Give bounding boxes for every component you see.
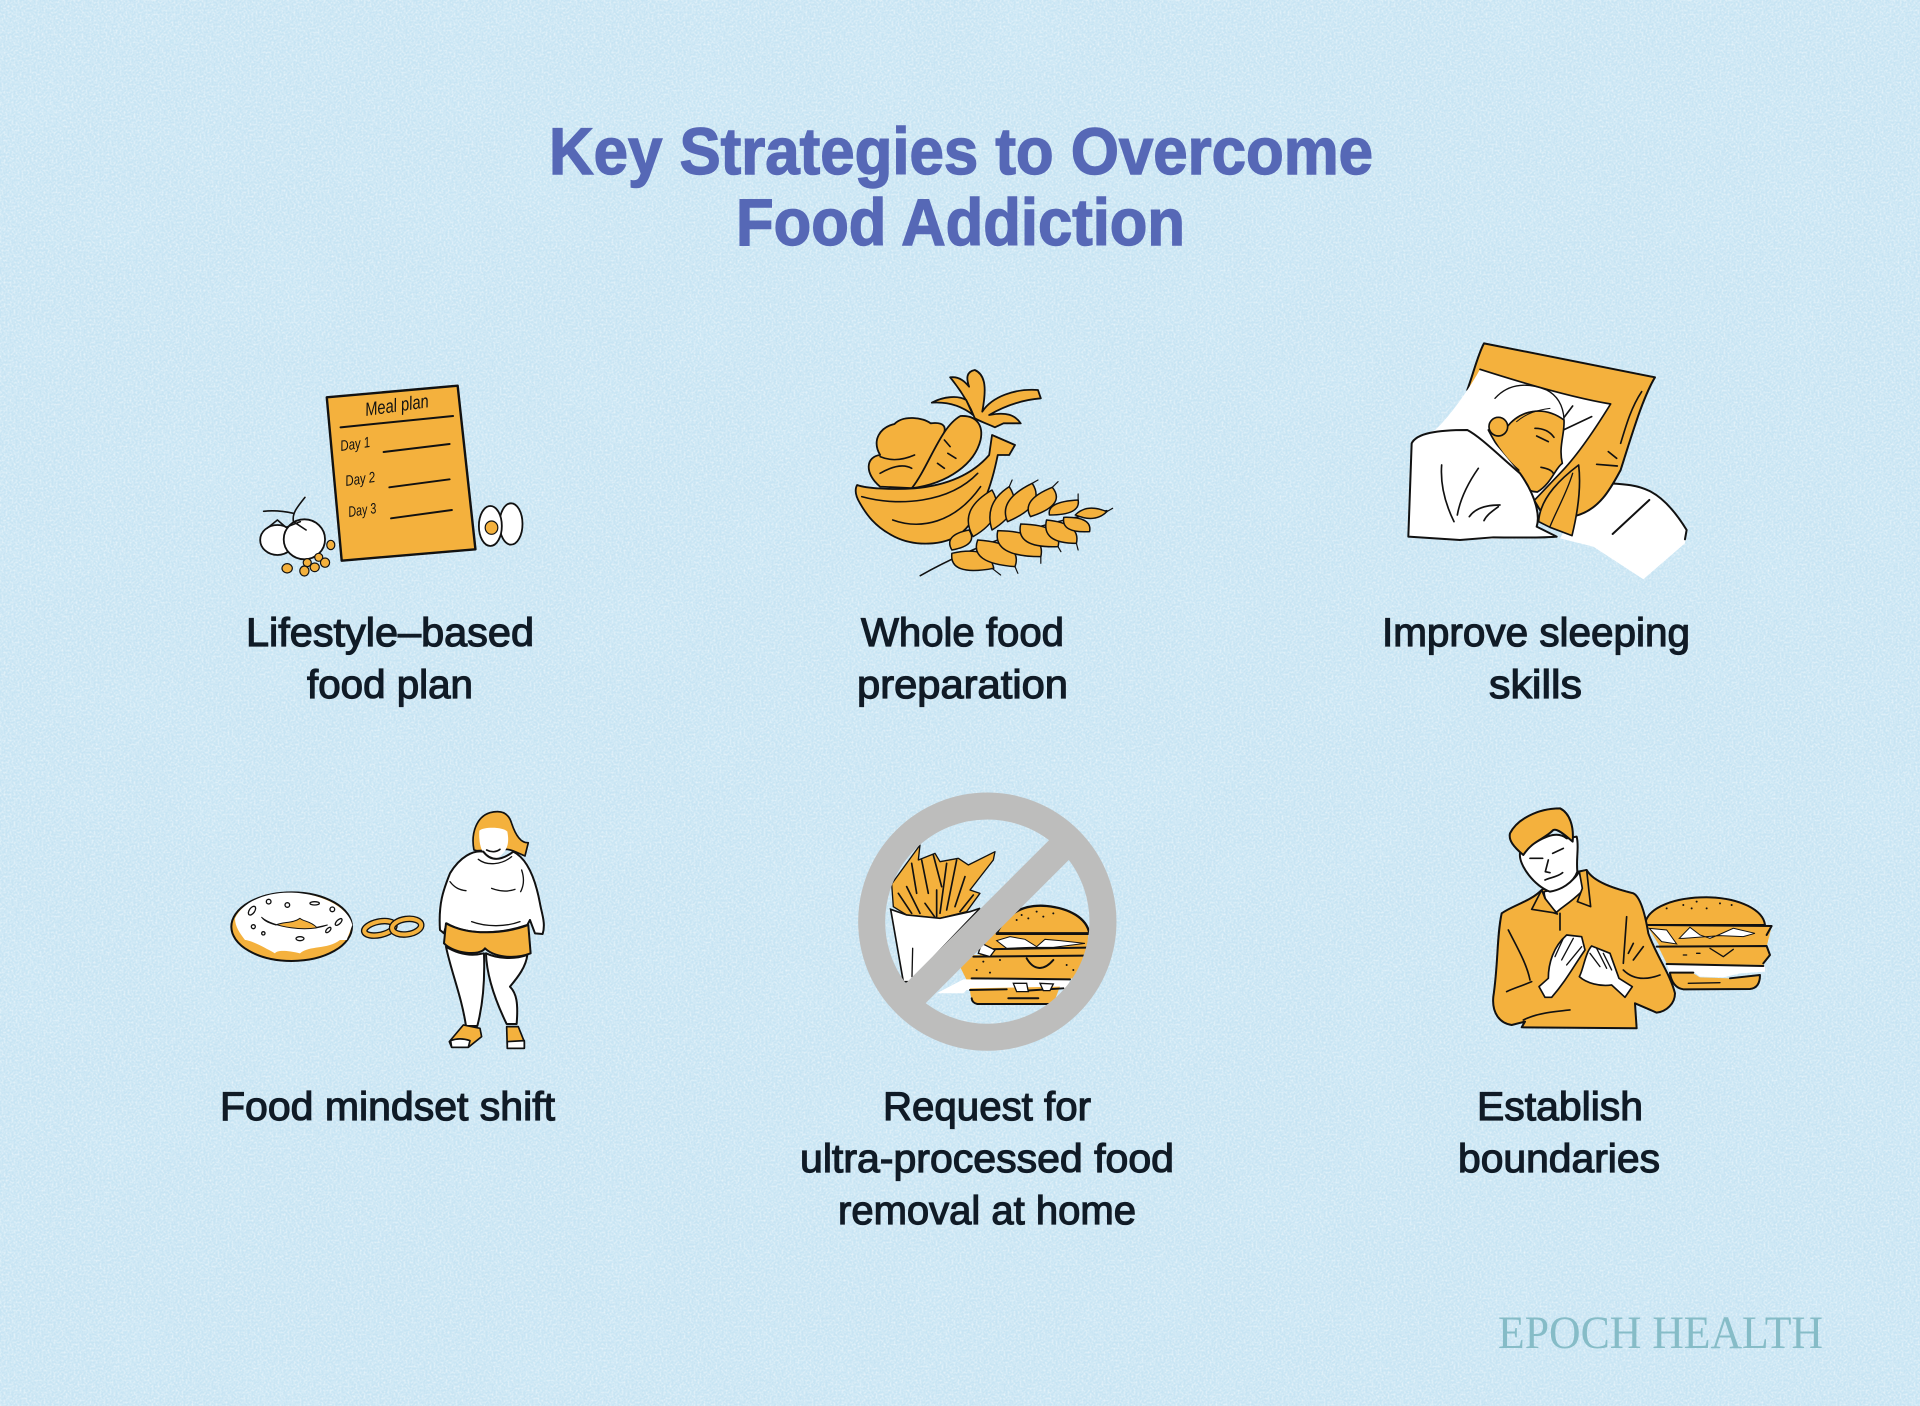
woman figure xyxy=(440,812,544,1048)
title xyxy=(549,114,1373,259)
label: establish boundaries: Establish xyxy=(1477,1085,1643,1129)
icon: prohibited fries and burger xyxy=(872,806,1103,1037)
icon: meal plan with tomatoes and egg xyxy=(260,386,522,576)
icon: meal plan with tomatoes and egg: Meal plan xyxy=(364,391,430,421)
label: whole food preparation: preparation xyxy=(857,663,1068,707)
icon: donut chained to person xyxy=(231,812,544,1048)
icon: whole foods bundle xyxy=(856,370,1113,576)
icon: sleeping person on pillow xyxy=(1408,343,1687,579)
title: Key Strategies to Overcome xyxy=(549,114,1373,188)
label: establish boundaries: boundaries xyxy=(1458,1137,1660,1181)
label: improve sleeping skills xyxy=(1382,611,1690,707)
label: lifestyle-based food plan xyxy=(246,611,534,707)
label: whole food preparation xyxy=(857,611,1068,707)
label: request for removal: ultra-processed food xyxy=(800,1137,1174,1181)
burger xyxy=(1645,897,1772,989)
label: improve sleeping skills: Improve sleeping xyxy=(1382,611,1690,655)
label: request for removal: removal at home xyxy=(838,1189,1136,1233)
donut xyxy=(231,892,352,961)
logo: Epoch Health: EPOCH HEALTH xyxy=(1498,1307,1823,1359)
label: request for removal: Request for xyxy=(883,1085,1091,1129)
icon: meal plan with tomatoes and egg: Day 1 xyxy=(339,434,371,455)
label: lifestyle-based food plan: food plan xyxy=(307,663,473,707)
man xyxy=(1493,808,1675,1028)
label: lifestyle-based food plan: Lifestyle–based xyxy=(246,611,534,655)
label: food mindset shift: Food mindset shift xyxy=(220,1085,555,1129)
title: Food Addiction xyxy=(736,185,1185,259)
label: request for removal xyxy=(800,1085,1174,1233)
icon: meal plan with tomatoes and egg: Day 3 xyxy=(347,500,378,521)
label: whole food preparation: Whole food xyxy=(861,611,1064,655)
label: improve sleeping skills: skills xyxy=(1489,663,1582,707)
icon: man refusing burger xyxy=(1493,808,1772,1028)
icon: meal plan with tomatoes and egg: Day 2 xyxy=(344,469,377,490)
label: establish boundaries xyxy=(1458,1085,1660,1181)
chain link xyxy=(363,917,422,938)
